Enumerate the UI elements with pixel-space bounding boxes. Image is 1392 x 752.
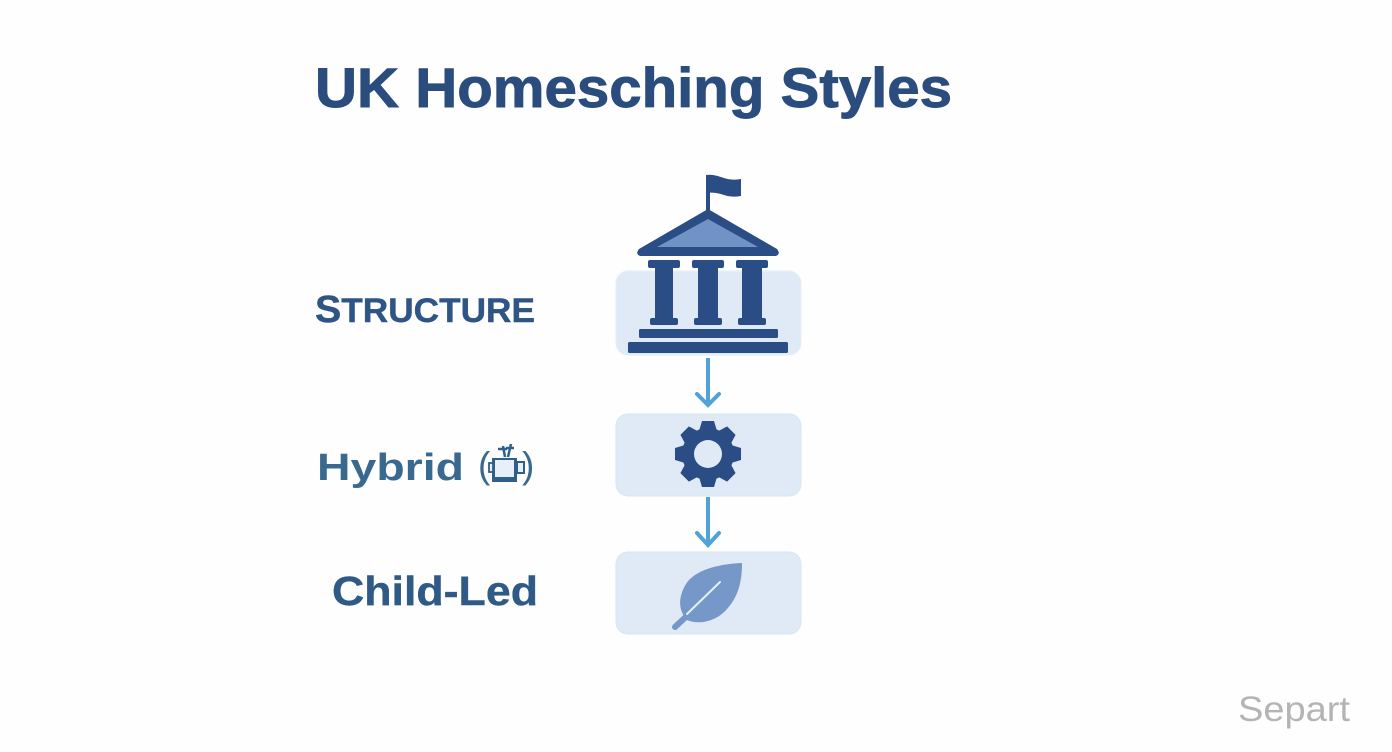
label: hybrid with icon [317,444,534,489]
label: hybrid with icon: ( [478,445,491,486]
icon: institution building with flag [628,175,788,353]
panel: hybrid box [616,414,801,496]
panel: child-led box [616,552,801,634]
arrow: structure to hybrid [697,358,719,405]
label: child-led: Child-Led [332,568,538,614]
label: hybrid with icon: ) [522,445,534,486]
arrow: hybrid to child-led [697,497,719,545]
label: structure: STRUCTURE [315,289,535,331]
icon: leaf [675,563,742,627]
label: hybrid with icon: Hybrid [317,447,464,489]
icon: gear [675,421,741,487]
watermark: Separt [1238,690,1350,729]
icon: mug with sprout [489,444,524,482]
panel: structure box [616,271,801,355]
title: UK Homesching Styles [315,56,952,119]
